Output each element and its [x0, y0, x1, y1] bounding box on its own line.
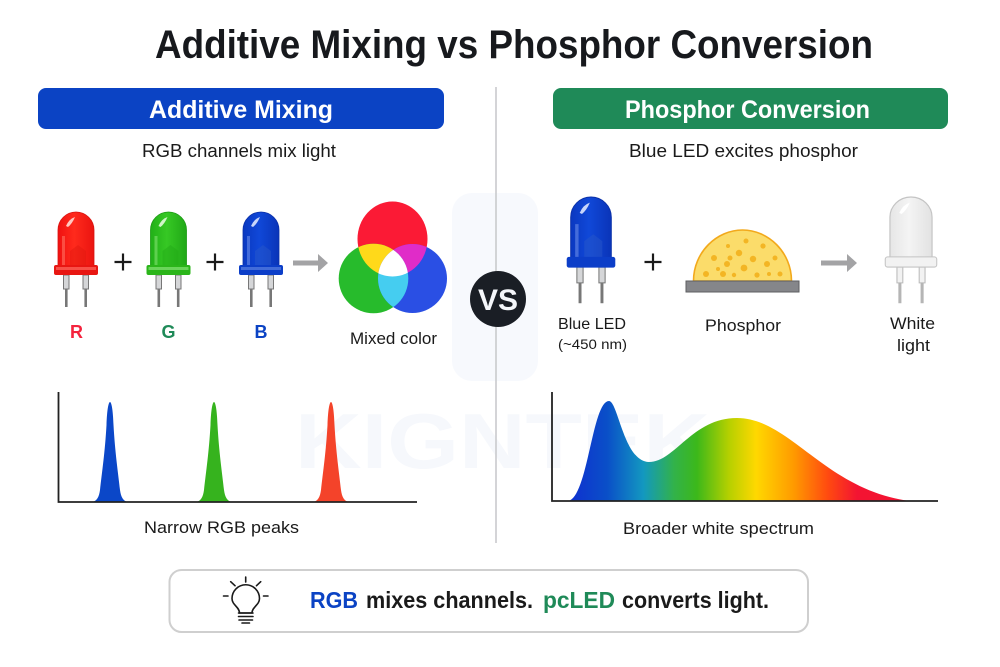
- label: G: G: [161, 322, 176, 342]
- plus: [114, 254, 132, 270]
- label: blue LED: Blue LED: [558, 316, 626, 333]
- label: white light: light: [897, 337, 930, 355]
- heading: phosphor conversion: [553, 88, 948, 129]
- center divider: [495, 87, 497, 543]
- label: mixed color: Mixed color: [350, 330, 438, 348]
- icon: phosphor dome: [686, 230, 799, 292]
- callout text: pcLED: [543, 587, 615, 613]
- watermark: [295, 193, 710, 485]
- label: white light: White: [890, 315, 935, 333]
- icon: color mixing circles: [339, 202, 447, 313]
- caption: narrow RGB peaks: Narrow RGB peaks: [144, 519, 299, 537]
- label: white light: [890, 315, 935, 355]
- icon: light bulb: [224, 577, 268, 623]
- chart: narrow RGB peaks: [58, 392, 417, 502]
- label: B: B: [254, 322, 268, 342]
- icon: white LED: [885, 197, 937, 303]
- panel: additive mixing: [38, 88, 447, 537]
- badge: VS: VS: [478, 284, 518, 317]
- callout text: RGB: [310, 587, 358, 613]
- icon: blue LED: [567, 197, 615, 303]
- subtitle: phosphor: Blue LED excites phosphor: [629, 141, 858, 161]
- icon: blue LED: [239, 212, 283, 307]
- heading: phosphor conversion: Phosphor Conversion: [625, 96, 870, 124]
- arrow: [821, 254, 857, 272]
- title: Additive Mixing vs Phosphor Conversion: [155, 23, 873, 67]
- callout text: mixes channels.: [366, 587, 533, 613]
- label: R: R: [70, 322, 83, 342]
- panel: phosphor conversion: [552, 88, 948, 538]
- plus: [644, 254, 662, 270]
- badge: VS: [470, 271, 526, 327]
- callout: [170, 570, 808, 632]
- label: blue LED: (~450 nm): [558, 337, 627, 352]
- icon: red LED: [54, 212, 98, 307]
- heading: additive mixing: Additive Mixing: [149, 96, 333, 124]
- callout text: converts light.: [622, 587, 769, 613]
- watermark: KIGNTEK: [295, 397, 710, 485]
- caption: broader white spectrum: Broader white spectrum: [623, 520, 814, 538]
- subtitle: additive: RGB channels mix light: [142, 141, 336, 161]
- heading: additive mixing: [38, 88, 444, 129]
- icon: green LED: [146, 212, 190, 307]
- label: blue LED: [558, 316, 627, 352]
- label: phosphor: Phosphor: [705, 317, 782, 335]
- chart: broad white spectrum: [552, 392, 938, 501]
- arrow: [293, 254, 328, 272]
- plus: [206, 254, 224, 270]
